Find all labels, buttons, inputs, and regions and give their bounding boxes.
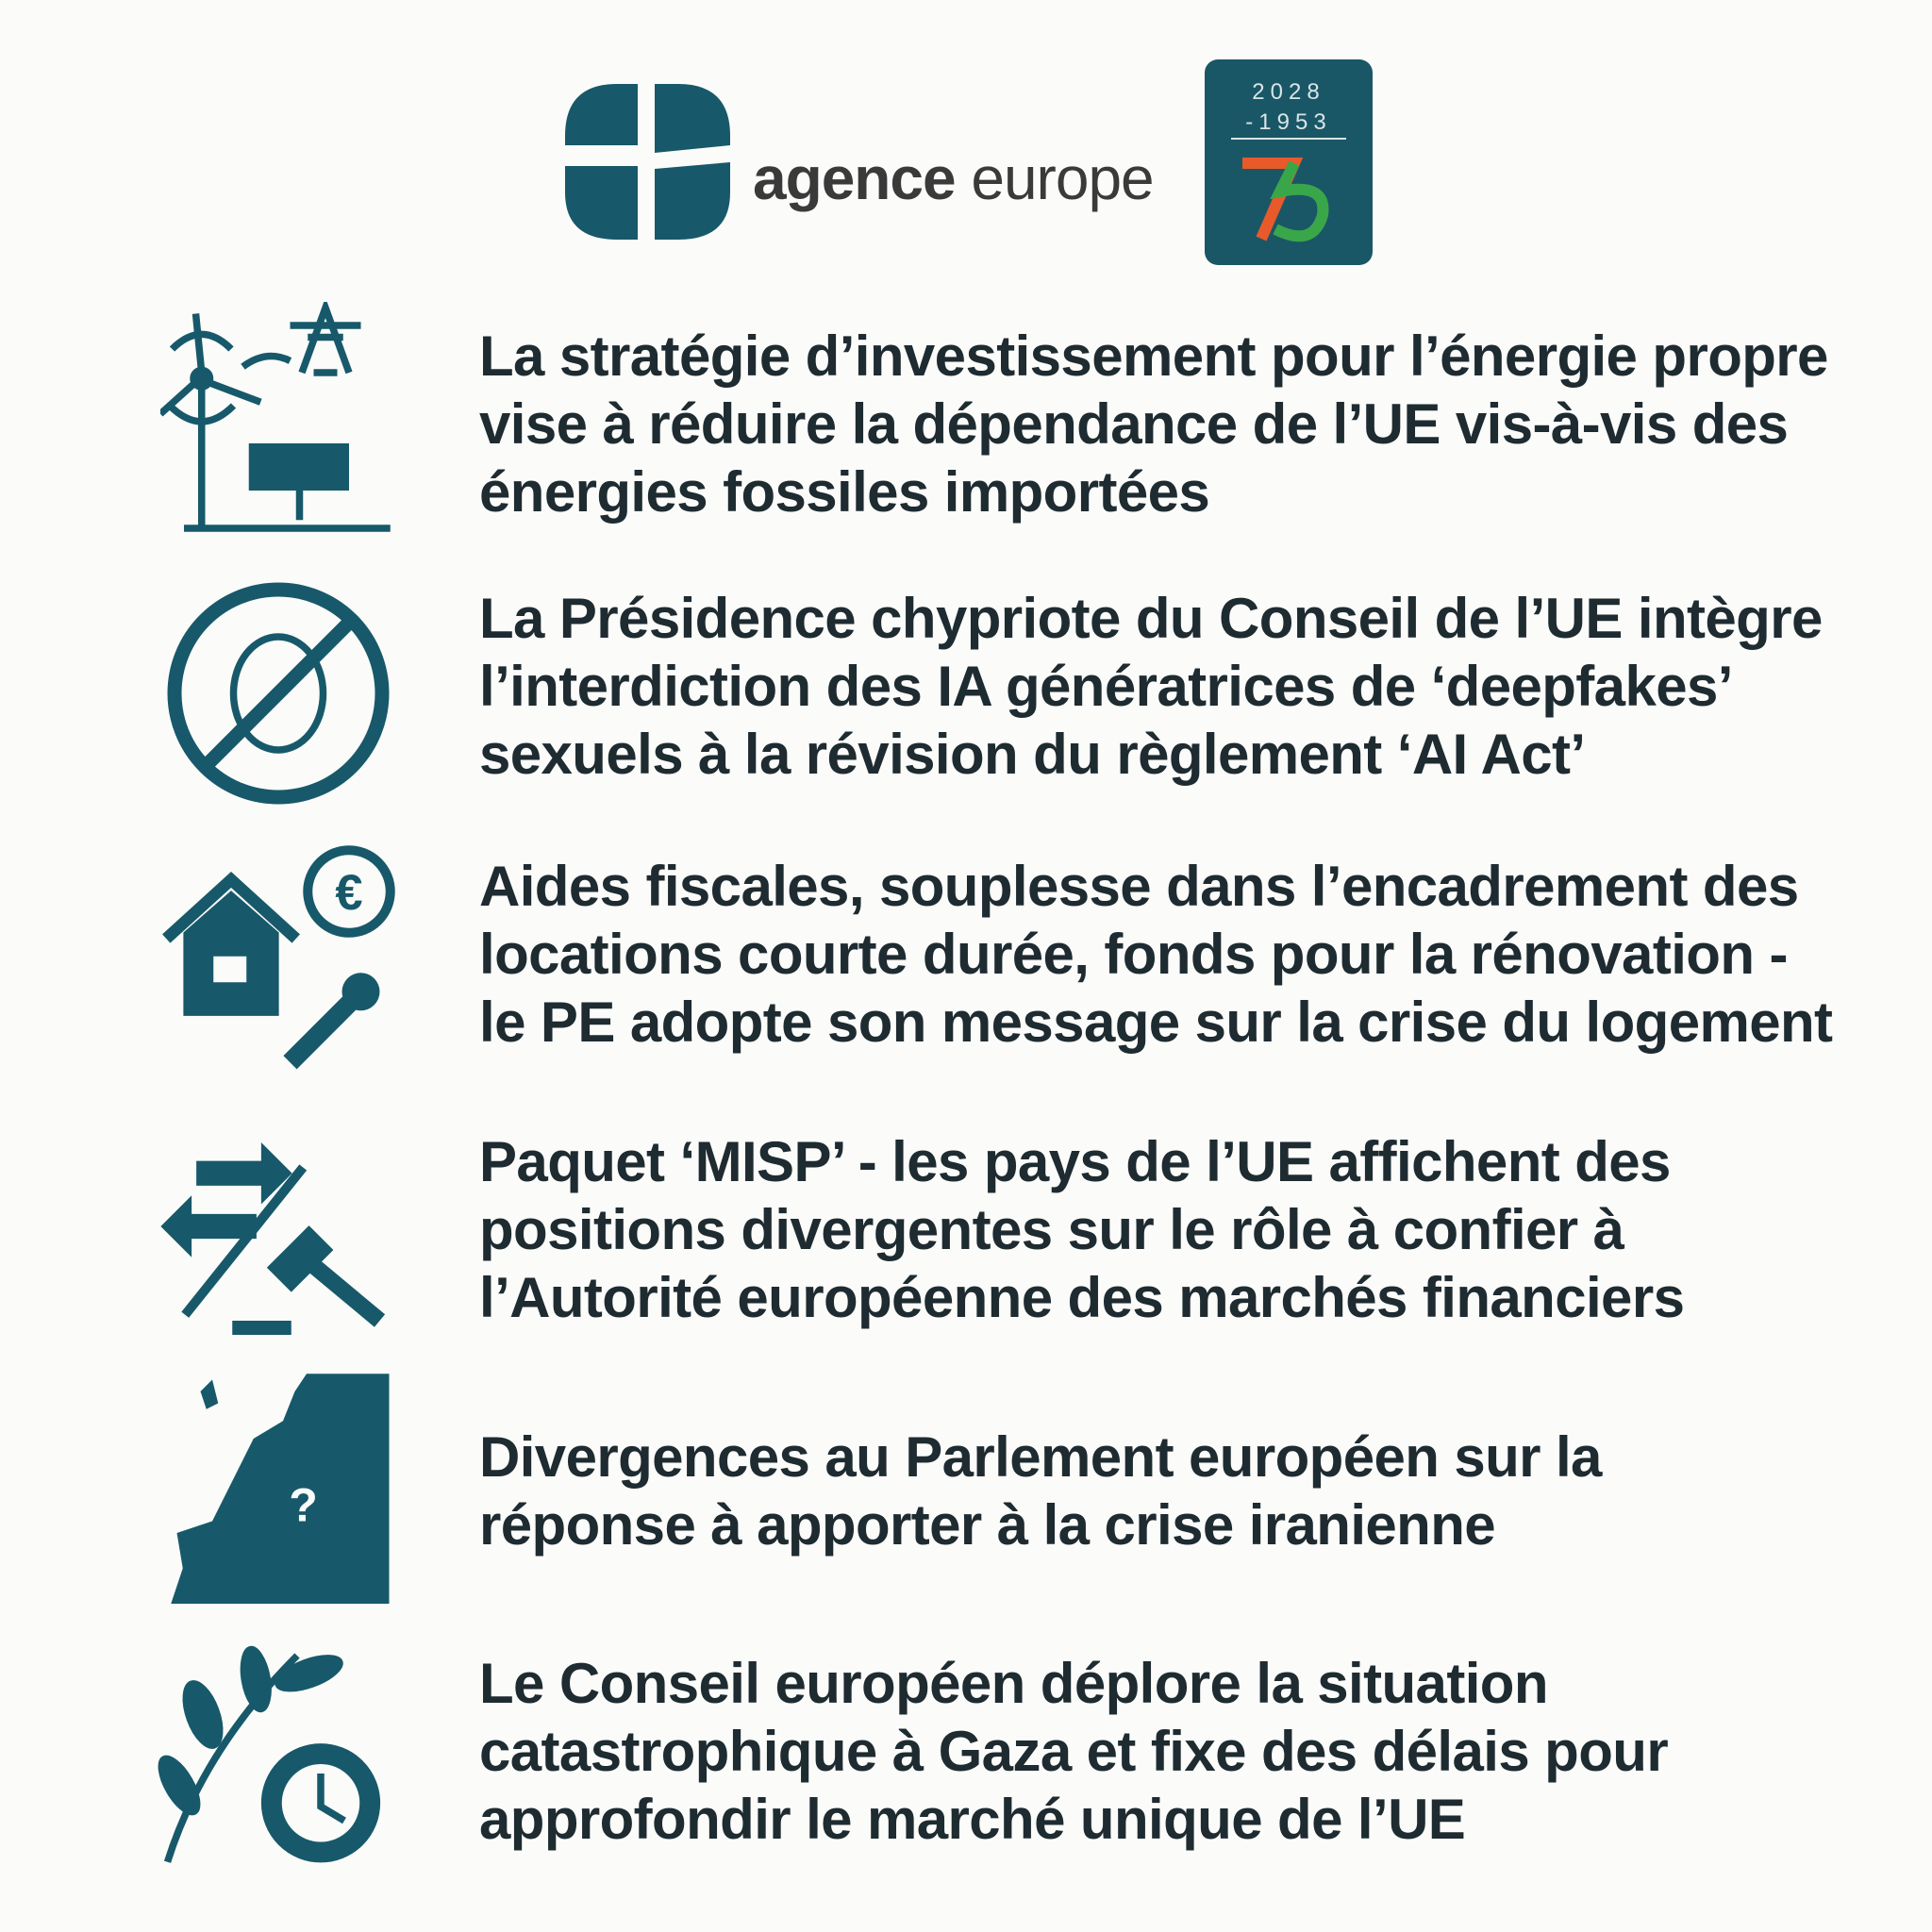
badge 75 bbox=[1205, 59, 1373, 265]
text block 2: l’interdiction des IA génératrices de ‘deepfakes’ bbox=[479, 655, 1733, 718]
text block 2 bbox=[479, 587, 1823, 786]
text block 6: catastrophique à Gaza et fixe des délais pour bbox=[479, 1720, 1668, 1783]
icon: housing: € bbox=[335, 865, 363, 921]
text block 4: Paquet ‘MISP’ - les pays de l’UE affichent des bbox=[479, 1130, 1671, 1193]
text block 3 bbox=[479, 855, 1832, 1054]
icon: housing bbox=[162, 845, 395, 1070]
text block 4 bbox=[479, 1130, 1684, 1329]
text block 1: La stratégie d’investissement pour l’énergie propre bbox=[479, 325, 1828, 388]
text block 1 bbox=[479, 325, 1828, 524]
text block 1: vise à réduire la dépendance de l’UE vis-à-vis des bbox=[479, 392, 1788, 456]
icon: europe map: ? bbox=[289, 1479, 318, 1531]
icon: energy bbox=[160, 302, 391, 532]
text block 4: positions divergentes sur le rôle à confier à bbox=[479, 1198, 1624, 1261]
icon: olive branch and gear clock bbox=[158, 1645, 381, 1863]
text block 3: locations courte durée, fonds pour la rénovation - bbox=[479, 923, 1788, 986]
badge 75: 2028 bbox=[1252, 79, 1325, 105]
text block 5 bbox=[479, 1425, 1603, 1557]
logo mark bbox=[565, 84, 730, 240]
icon: deepfake ban bbox=[168, 583, 389, 804]
text block 3: le PE adopte son message sur la crise du logement bbox=[479, 991, 1832, 1054]
icon: market regulation bbox=[160, 1142, 385, 1335]
text block 4: l’Autorité européenne des marchés financiers bbox=[479, 1266, 1684, 1329]
logo text: agence europe bbox=[753, 144, 1154, 212]
logo header bbox=[565, 59, 1373, 265]
text block 5: réponse à apporter à la crise iranienne bbox=[479, 1493, 1495, 1557]
text block 2: sexuels à la révision du règlement ‘AI Act’ bbox=[479, 723, 1585, 786]
text block 6: Le Conseil européen déplore la situation bbox=[479, 1652, 1548, 1715]
text block 2: La Présidence chypriote du Conseil de l’UE intègre bbox=[479, 587, 1823, 650]
text block 3: Aides fiscales, souplesse dans l’encadrement des bbox=[479, 855, 1798, 918]
icon: europe map bbox=[171, 1374, 389, 1604]
badge 75: -1953 bbox=[1245, 109, 1332, 135]
text block 5: Divergences au Parlement européen sur la bbox=[479, 1425, 1602, 1489]
text block 6: approfondir le marché unique de l’UE bbox=[479, 1788, 1465, 1851]
text block 1: énergies fossiles importées bbox=[479, 460, 1209, 524]
text block 6 bbox=[479, 1652, 1668, 1851]
